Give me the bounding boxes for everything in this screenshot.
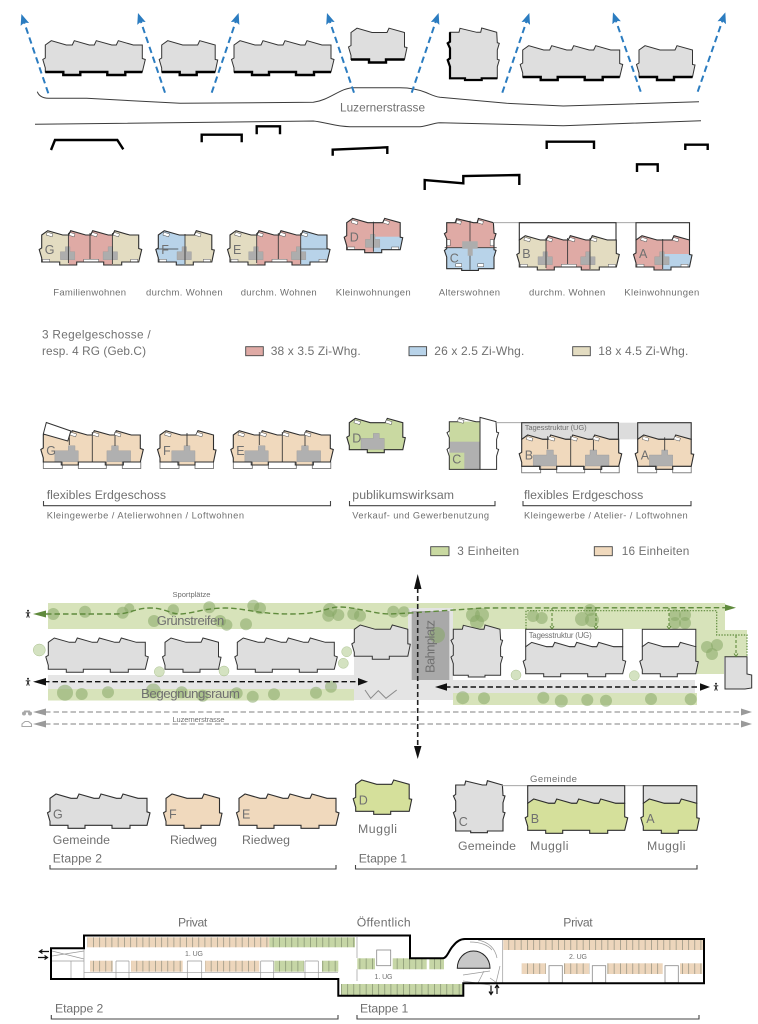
ground floor C	[447, 417, 499, 469]
section: ground floor plans	[41, 417, 694, 558]
owner F	[164, 794, 222, 847]
owner C	[453, 781, 516, 853]
buildings in site plan	[46, 625, 752, 689]
heading: Öffentlich: Öffentlich	[357, 916, 411, 930]
plan C	[444, 218, 497, 271]
connector line: Tagesstruktur	[497, 422, 522, 424]
ground floor A: A	[641, 448, 650, 462]
building B	[520, 46, 623, 80]
owner F: Riedweg	[170, 833, 217, 847]
zigzag ramp	[365, 690, 397, 698]
bracket: Etappe 1: Etappe 1	[360, 1002, 409, 1016]
owner A: Muggli	[647, 839, 685, 853]
building F	[159, 41, 218, 75]
green dotted access lines	[526, 608, 747, 657]
bracket: Etappe 2: Etappe 2	[55, 1002, 104, 1016]
plaza	[354, 608, 695, 700]
owner D: Muggli	[358, 822, 397, 836]
plan B: B	[522, 247, 531, 261]
plan captions: Kleinwohnungen	[624, 287, 699, 298]
owner B	[525, 786, 628, 853]
labels: site plan	[141, 590, 438, 724]
owner E: Riedweg	[242, 833, 290, 847]
ground floor B: Tagesstruktur (UG)	[525, 423, 587, 432]
bracket: Etappe 1: Etappe 1	[359, 852, 407, 866]
plan B	[516, 222, 620, 270]
note: Regelgeschosse	[42, 327, 151, 358]
ground floor D	[347, 418, 405, 453]
green strip right	[453, 693, 697, 705]
section: underground parking plan	[38, 916, 704, 1019]
gray strip left	[48, 675, 354, 689]
black building edge brackets	[51, 126, 708, 190]
plan captions: durchm. Wohnen	[529, 287, 605, 298]
icon: entry arrows bottom	[489, 985, 499, 994]
labels: site plan: Begegnungsraum	[141, 686, 240, 701]
section: site view corridors	[22, 13, 725, 190]
plan G	[38, 230, 142, 266]
legend: units	[431, 544, 689, 558]
site building B with Tagesstruktur	[523, 629, 626, 677]
site building G	[46, 638, 148, 672]
parking top row public	[269, 937, 355, 947]
site building B with Tagesstruktur: Tagesstruktur (UG)	[529, 631, 592, 640]
building E	[232, 41, 334, 75]
labels: parking levels: 2. UG	[569, 954, 587, 961]
building A	[636, 46, 695, 80]
owner E: E	[242, 807, 250, 821]
plan F	[155, 230, 215, 266]
group: flexibles Erdgeschoss right: Kleingewerbe / Atelier- / Loftwohnen	[524, 510, 688, 520]
bracket: Etappe 2: Etappe 2	[53, 852, 102, 866]
black pedestrian arrow right	[435, 683, 710, 691]
plan E: E	[233, 243, 241, 257]
parking outer wall	[51, 936, 704, 996]
site building D	[352, 625, 410, 659]
legend: apartment types	[246, 344, 688, 358]
bracket: Etappe 1	[357, 1002, 699, 1019]
plan captions: Kleinwohnungen	[336, 287, 411, 298]
plan captions: durchm. Wohnen	[241, 287, 317, 298]
plan G: G	[45, 243, 54, 257]
owner B: B	[531, 812, 539, 826]
icon: car	[22, 722, 32, 726]
gray road arrows	[33, 708, 752, 728]
group: publikumswirksam: publikumswirksam	[352, 488, 454, 502]
site building C	[451, 625, 503, 677]
ground floor E	[231, 431, 333, 468]
group: flexibles Erdgeschoss right	[523, 488, 691, 520]
plan C: C	[450, 252, 459, 266]
group: flexibles Erdgeschoss left: Kleingewerbe / Atelierwohnen / Loftwohnen	[47, 510, 244, 520]
owner G: Gemeinde	[53, 833, 110, 847]
bracket: Etappe 2	[50, 852, 336, 869]
plan captions: Alterswohnen	[439, 287, 500, 298]
site building A	[640, 629, 698, 677]
legend: units: 3 Einheiten	[457, 544, 519, 558]
labels: parking levels: 1. UG	[185, 951, 203, 958]
legend: apartment types: 18 x 4.5 Zi-Whg.	[598, 344, 688, 358]
owner B: Muggli	[530, 839, 569, 853]
plan D	[344, 218, 404, 254]
building C	[448, 28, 499, 80]
section: ownership and stages	[48, 774, 699, 869]
icon: pedestrian	[26, 678, 30, 686]
note: Regelgeschosse: 3 Regelgeschosse /	[42, 327, 151, 341]
trees	[33, 600, 723, 708]
note: Regelgeschosse: resp. 4 RG (Geb.C)	[42, 344, 146, 358]
site building F	[162, 638, 221, 672]
building G	[43, 41, 145, 75]
vertical axis arrow	[414, 574, 422, 759]
connector line with Gemeinde label: Gemeinde	[530, 774, 577, 785]
group: flexibles Erdgeschoss left: flexibles Erdgeschoss	[47, 488, 166, 502]
legend: units: 16 Einheiten	[622, 544, 689, 558]
group: flexibles Erdgeschoss left	[44, 488, 330, 520]
owner D	[353, 780, 412, 836]
buildings top row	[43, 28, 695, 80]
bracket: Etappe 1	[356, 852, 697, 869]
group: publikumswirksam	[350, 488, 495, 520]
ground floor A	[635, 423, 694, 473]
heading: Privat: Privat	[563, 916, 593, 930]
section: site circulation plan	[22, 574, 752, 759]
small east building	[725, 657, 752, 689]
owner C: C	[459, 815, 468, 829]
ground floor F	[158, 431, 216, 468]
blue view arrows	[22, 13, 725, 93]
owner D: D	[359, 793, 368, 807]
Bahnplatz square	[412, 611, 449, 680]
labels: site plan: Bahnplatz	[422, 620, 438, 673]
ground floor F: F	[163, 444, 171, 458]
plan D: D	[350, 231, 359, 245]
owner G: G	[53, 807, 63, 821]
parking public centre	[341, 950, 462, 995]
road edges: Luzernerstrasse	[35, 88, 701, 127]
parking mid row left	[90, 961, 338, 972]
plan E	[226, 230, 331, 266]
label: Luzernerstrasse: Luzernerstrasse	[340, 100, 425, 114]
section: upper floor plans (3 Regelgeschosse)	[37, 217, 699, 358]
ground floor C: C	[452, 453, 461, 467]
group: flexibles Erdgeschoss right: flexibles Erdgeschoss	[524, 488, 643, 502]
plan A	[632, 222, 693, 270]
labels: parking levels	[185, 951, 587, 981]
ground floor B: B	[525, 448, 533, 462]
ground floor D: D	[352, 432, 361, 446]
building D	[348, 28, 407, 62]
owner A	[641, 786, 699, 853]
icon: pedestrian	[26, 610, 30, 618]
icon: entry arrows left	[38, 950, 49, 960]
labels: site plan: Sportplätze	[172, 590, 210, 599]
plan captions: durchm. Wohnen	[146, 287, 223, 298]
icon: pedestrian	[714, 683, 718, 691]
plan captions: Familienwohnen	[53, 287, 126, 298]
heading: Privat: Privat	[178, 916, 208, 930]
labels: site plan: Grünstreifen	[157, 613, 224, 628]
labels: parking levels: 1. UG	[374, 974, 392, 981]
icon: motorbike	[22, 710, 32, 716]
green path dashed	[33, 604, 736, 618]
plan captions	[53, 287, 699, 298]
parking structural lines	[51, 937, 503, 985]
site building E	[235, 638, 337, 672]
owner G	[48, 794, 150, 847]
plan A: A	[639, 247, 648, 261]
parking right rows	[503, 940, 703, 983]
parking top row private	[87, 937, 269, 947]
green strip: Begegnungsraum	[48, 689, 354, 700]
owner C: Gemeinde	[458, 839, 516, 853]
ground floor G: G	[46, 444, 56, 458]
ground floor G	[41, 422, 143, 468]
owner F: F	[169, 807, 177, 821]
black pedestrian arrow left	[33, 678, 368, 686]
bracket: Etappe 2	[51, 1002, 338, 1019]
connector line to plans B and A	[493, 222, 636, 224]
legend: apartment types: 38 x 3.5 Zi-Whg.	[271, 344, 361, 358]
group: publikumswirksam: Verkauf- und Gewerbenutzung	[352, 510, 489, 520]
legend: apartment types: 26 x 2.5 Zi-Whg.	[434, 344, 524, 358]
labels: site plan: Luzernerstrasse	[172, 715, 224, 724]
ground floor E: E	[236, 444, 245, 458]
ground floor gray link between B and A	[618, 423, 638, 439]
owner E	[236, 794, 339, 847]
green strip: Grünstreifen	[48, 603, 747, 674]
ground floor B	[519, 423, 622, 473]
owner A: A	[646, 812, 655, 826]
plan F: F	[161, 243, 169, 257]
ramp dome	[457, 951, 490, 968]
